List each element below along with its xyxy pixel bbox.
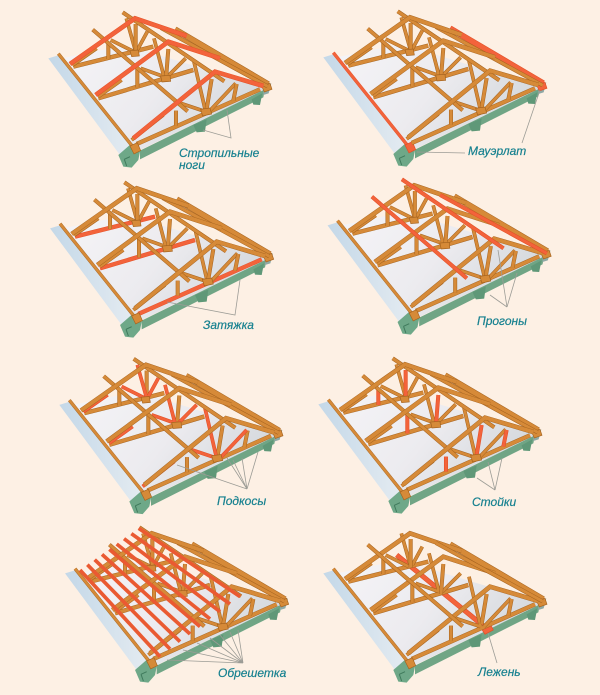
- panel: Стойки: [318, 358, 542, 514]
- leader lines: [490, 250, 517, 307]
- roof frame with highlighted wall plates: [323, 11, 547, 167]
- label: Мауэрлат: Мауэрлат: [468, 144, 526, 158]
- leader lines: [417, 90, 540, 153]
- panel: Стропильные ноги: [48, 12, 272, 172]
- panel: Прогоны: [328, 179, 551, 335]
- roof frame with highlighted posts: [318, 358, 542, 514]
- label: Стропильные ноги: Стропильные: [179, 146, 260, 160]
- leader lines: [203, 110, 231, 138]
- leader line: [488, 633, 497, 663]
- panel: Затяжка: [50, 182, 274, 338]
- roof frame with highlighted rafters: [48, 12, 272, 168]
- panel: Лежень: [323, 533, 547, 683]
- roof frame with highlighted struts: [59, 359, 283, 514]
- label: Стропильные ноги: ноги: [179, 158, 205, 172]
- label: Подкосы: Подкосы: [217, 494, 266, 508]
- label: Лежень: Лежень: [477, 665, 521, 679]
- label: Затяжка: Затяжка: [203, 318, 254, 332]
- panel: Обрешетка: [65, 527, 289, 683]
- label: Стойки: Стойки: [472, 495, 517, 509]
- roof frame with highlighted purlins: [328, 179, 551, 335]
- label: Прогоны: Прогоны: [477, 314, 527, 328]
- label: Обрешетка: Обрешетка: [218, 666, 287, 680]
- leader lines: [167, 280, 240, 315]
- roof frame with highlighted tie beams: [50, 182, 274, 338]
- panel: Подкосы: [59, 359, 283, 514]
- roof frame with highlighted battens: [65, 527, 289, 683]
- leader lines: [177, 452, 258, 489]
- panel: Мауэрлат: [323, 11, 547, 167]
- leader lines: [477, 458, 502, 490]
- leader lines: [167, 630, 243, 663]
- roof frame with highlighted ledger: [323, 533, 547, 683]
